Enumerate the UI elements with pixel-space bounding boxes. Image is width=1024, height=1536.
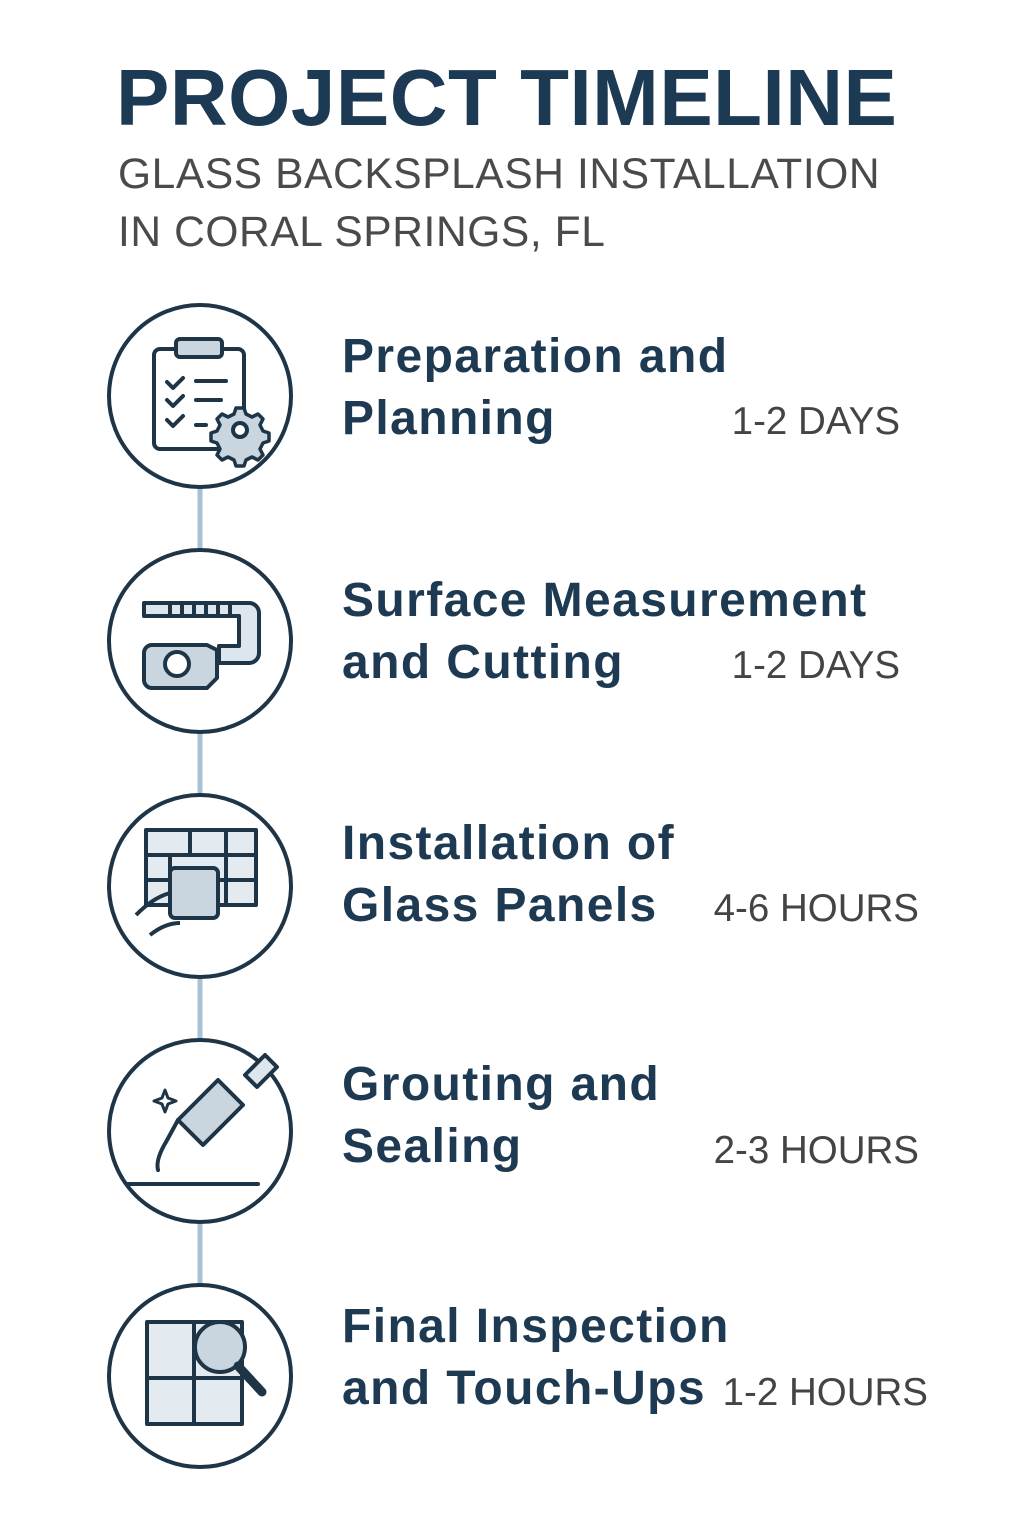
- connector lines: [198, 488, 202, 1284]
- step 5: Final Inspection: [342, 1300, 730, 1353]
- step 1: [342, 330, 728, 445]
- step 2: and Cutting: [342, 636, 624, 689]
- icon: glass panels: [109, 795, 291, 977]
- icon: caulk gun: [109, 1040, 291, 1222]
- step 1: Preparation and: [342, 330, 728, 383]
- subtitle: [118, 151, 880, 256]
- step 2: Surface Measurement: [342, 574, 867, 627]
- text: 4-6 HOURS: [714, 887, 919, 930]
- step 5: and Touch-Ups: [342, 1362, 706, 1415]
- step 3: Glass Panels: [342, 879, 658, 932]
- step 2: [342, 574, 867, 689]
- step 1: Planning: [342, 392, 556, 445]
- text: 1-2 HOURS: [723, 1371, 928, 1414]
- step 3: [342, 817, 675, 932]
- icon: tape measure: [109, 550, 291, 732]
- step 4: Sealing: [342, 1120, 523, 1173]
- text: 2-3 HOURS: [714, 1129, 919, 1172]
- icon: inspection: [109, 1285, 291, 1467]
- step 4: [342, 1058, 660, 1173]
- subtitle: IN CORAL SPRINGS, FL: [118, 209, 605, 256]
- subtitle: GLASS BACKSPLASH INSTALLATION: [118, 151, 880, 198]
- icon: clipboard: [109, 305, 291, 487]
- text: 1-2 DAYS: [732, 400, 900, 443]
- text: 1-2 DAYS: [732, 644, 900, 687]
- title: PROJECT TIMELINE: [116, 53, 897, 142]
- step 3: Installation of: [342, 817, 675, 870]
- step 4: Grouting and: [342, 1058, 660, 1111]
- step 5: [342, 1300, 730, 1415]
